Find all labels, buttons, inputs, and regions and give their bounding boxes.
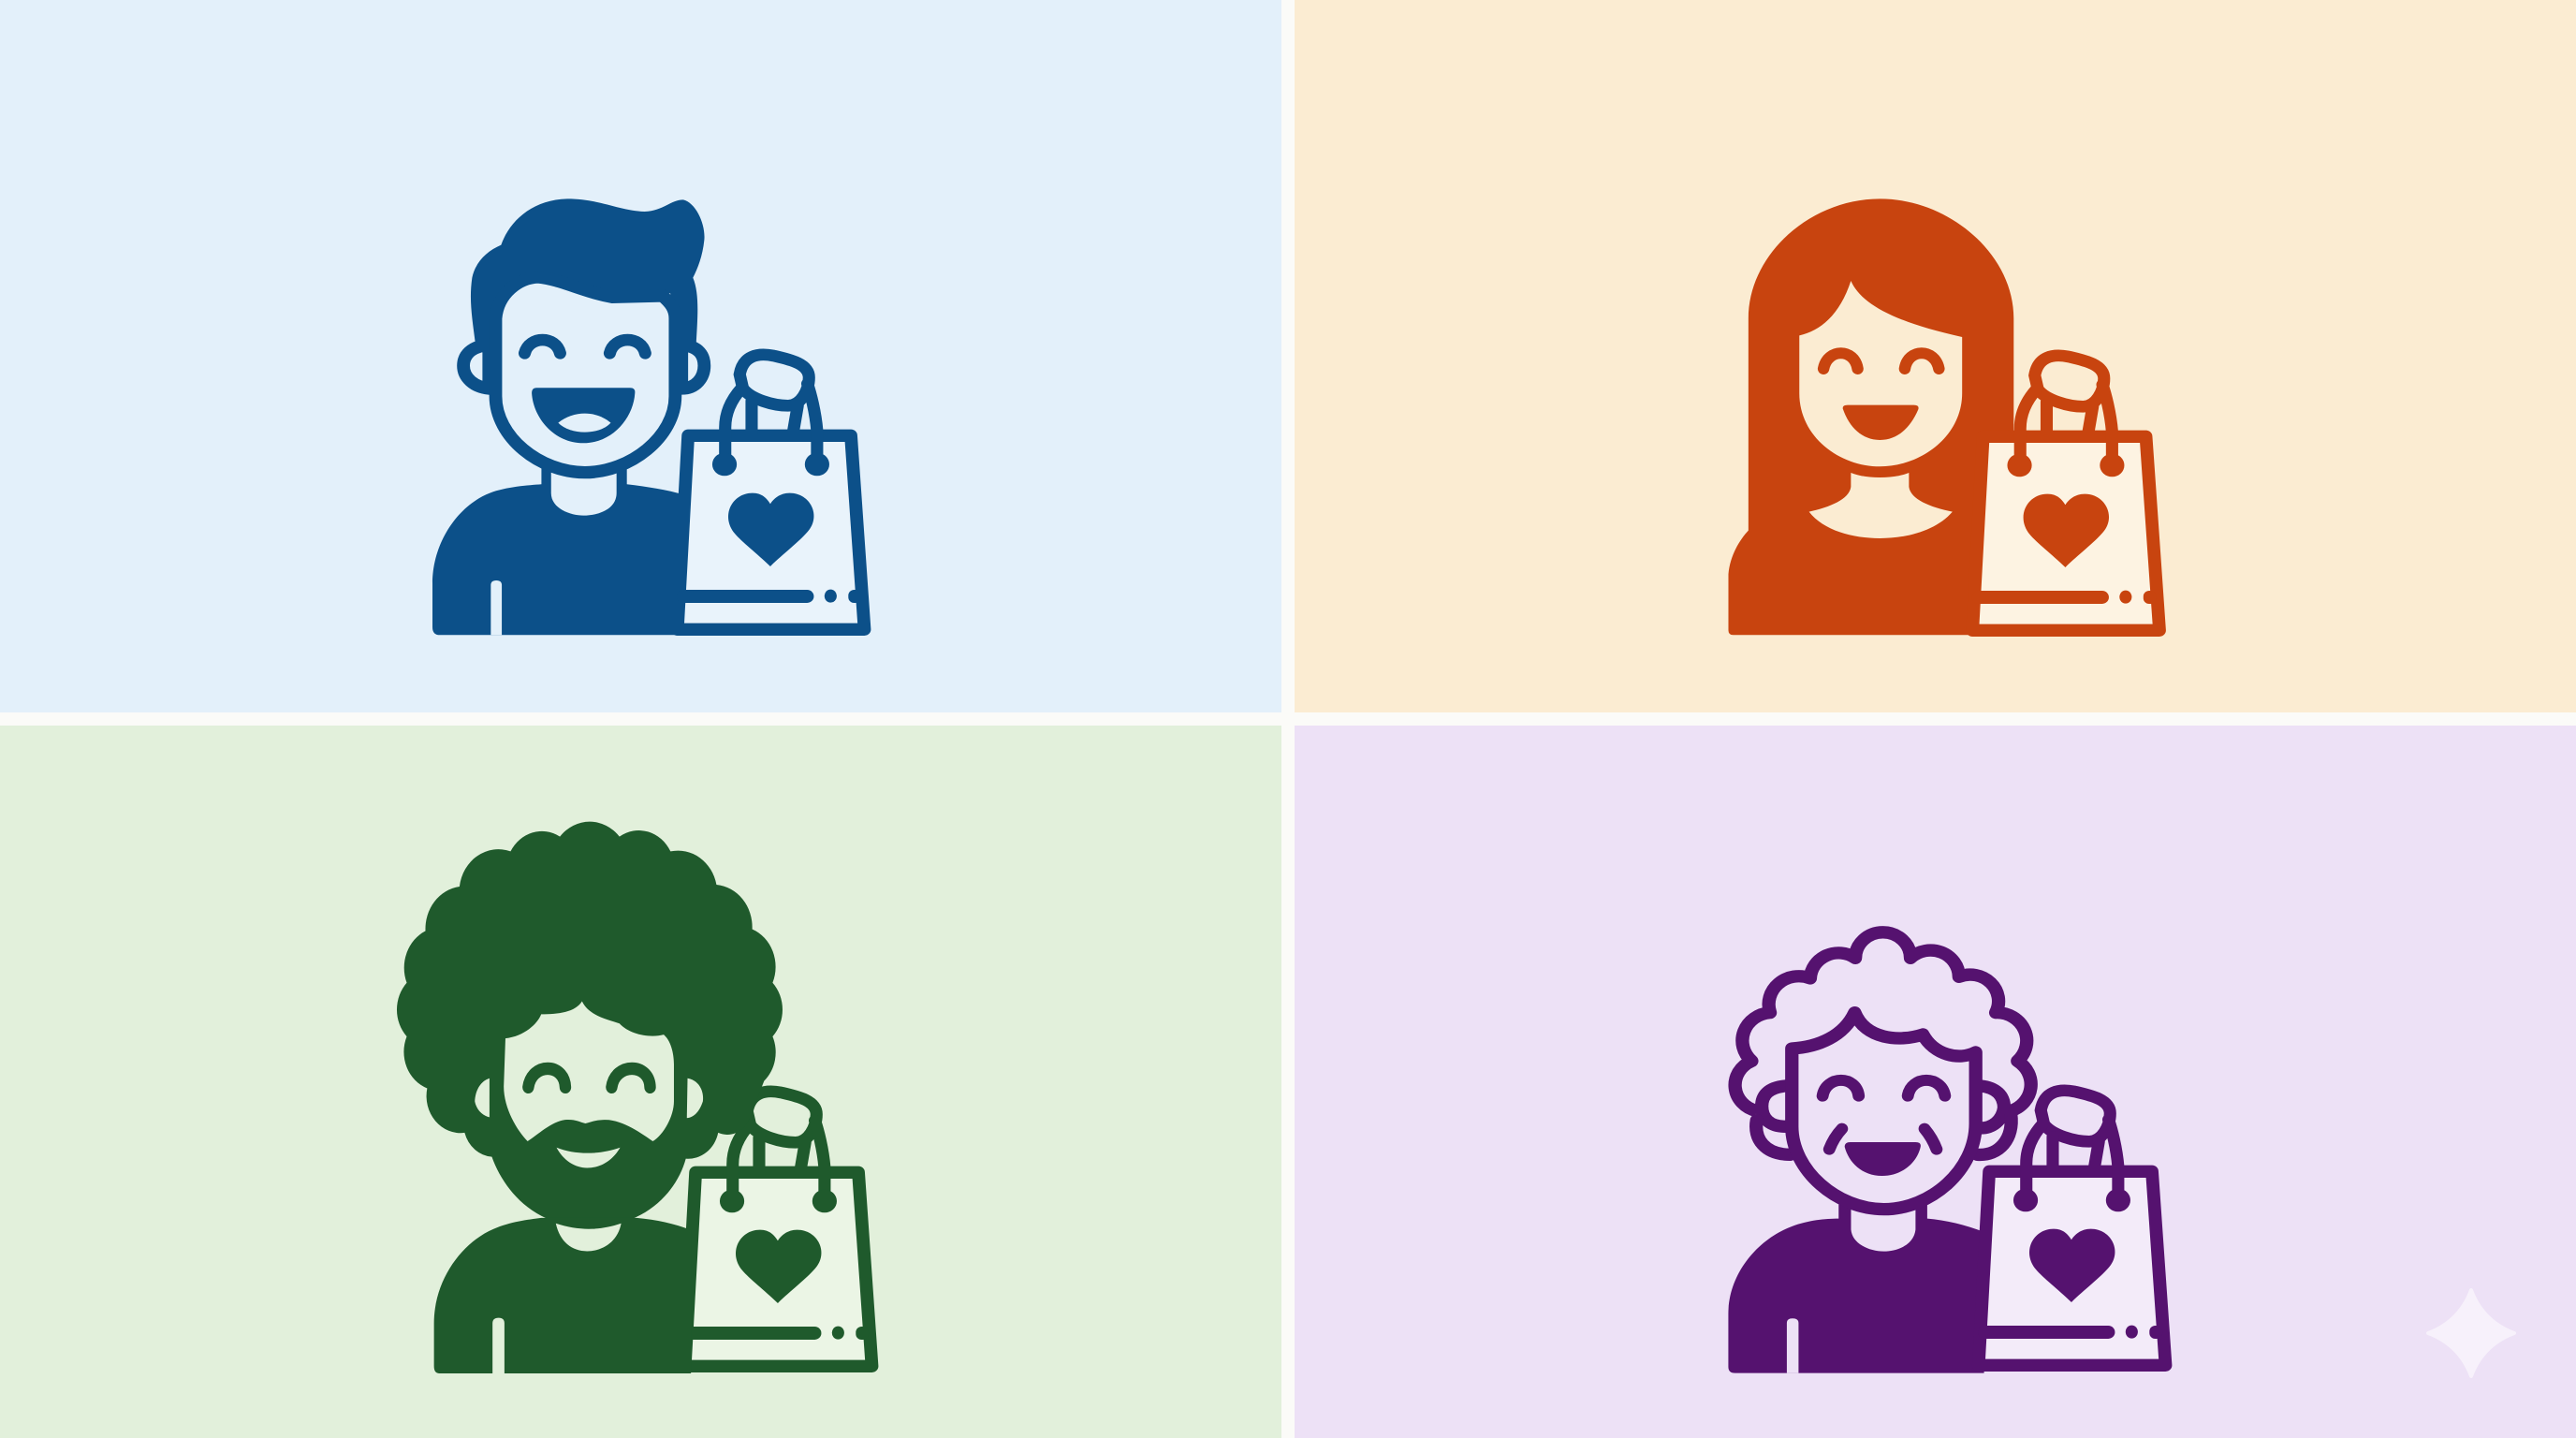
afro hair and beard [397, 822, 783, 1227]
heart [2024, 494, 2109, 567]
body [432, 468, 683, 635]
cheek lines [1829, 1129, 1937, 1150]
bag handles [2020, 356, 2112, 466]
body [434, 1218, 691, 1373]
eyes [1822, 1080, 1945, 1096]
neck [1851, 1208, 1915, 1252]
heart [728, 493, 814, 566]
neck and chest [1809, 473, 1953, 538]
teeth [558, 414, 610, 433]
arm gap [492, 1318, 505, 1373]
handle knobs [712, 453, 829, 476]
heart [736, 1230, 822, 1303]
bag stripe [677, 590, 861, 603]
bag handles [2027, 1091, 2118, 1201]
ears [463, 345, 704, 389]
face [1799, 281, 1962, 466]
bag body [678, 435, 865, 629]
bag handles [733, 1092, 825, 1202]
icon: shopping bag [1972, 356, 2159, 630]
arm gap [490, 580, 502, 635]
icon: smiling woman [1728, 198, 2013, 635]
mouth [1845, 1142, 1921, 1176]
handle knobs [720, 1190, 837, 1212]
mouth [557, 1148, 621, 1167]
bag stripe [684, 1327, 869, 1340]
icon: smiling older woman [1728, 932, 2031, 1373]
neck [551, 468, 617, 516]
neck [556, 1224, 622, 1251]
ears and lower curls [1756, 1086, 2012, 1154]
mouth [1843, 405, 1919, 440]
hair [471, 198, 705, 344]
long hair and body [1728, 198, 2013, 635]
icon: shopping bag [684, 1092, 872, 1366]
eyes [528, 1068, 651, 1087]
ears [475, 1078, 703, 1118]
eyes [525, 340, 645, 353]
bag stripe [1972, 591, 2157, 604]
panel: green bearded man with shopping bag [0, 726, 1281, 1438]
bag body [1979, 1171, 2166, 1365]
icon: bearded man with afro [397, 822, 783, 1373]
panel: orange woman with shopping bag [1295, 0, 2576, 712]
heart [2029, 1229, 2115, 1302]
bag handles [725, 355, 817, 465]
panel: blue man with shopping bag [0, 0, 1281, 712]
body [1728, 1205, 1984, 1373]
face [504, 1002, 674, 1141]
arm gap [1787, 1318, 1798, 1373]
face [496, 277, 675, 473]
icon: shopping bag [1978, 1091, 2166, 1365]
icon: shopping bag [677, 355, 865, 629]
face [1792, 1013, 1976, 1210]
icon: smiling man [432, 198, 705, 635]
panel: purple grandmother with shopping bag [1295, 726, 2576, 1438]
handle knobs [2007, 454, 2124, 477]
handle knobs [2013, 1189, 2130, 1211]
eyes [1823, 353, 1939, 369]
curly hair [1735, 932, 2031, 1111]
bag body [685, 1172, 872, 1366]
mouth [532, 388, 635, 443]
bag body [1972, 436, 2159, 630]
icon: sparkle watermark [2428, 1290, 2514, 1376]
bag stripe [1978, 1326, 2162, 1339]
